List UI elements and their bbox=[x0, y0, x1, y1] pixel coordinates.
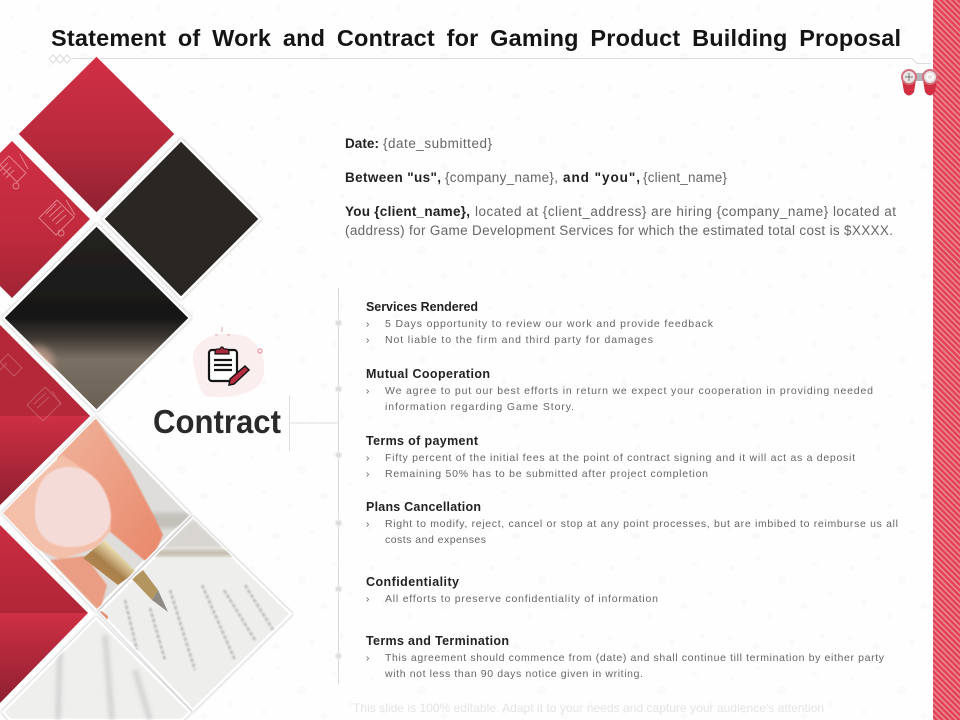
index finger bbox=[55, 418, 163, 565]
footer note: This slide is 100% editable. Adapt it to your needs and capture your audience's attention bbox=[353, 701, 824, 715]
section: services rendered bbox=[366, 300, 714, 346]
section: services rendered: › bbox=[366, 319, 369, 330]
right striped band bbox=[933, 0, 960, 720]
section: confidentiality bbox=[366, 575, 658, 605]
icon: contract clipboard bbox=[193, 327, 264, 397]
dark diamond bbox=[103, 140, 260, 298]
thumb bbox=[0, 455, 111, 560]
lower paper diamond bbox=[3, 618, 190, 720]
nail bbox=[35, 467, 111, 547]
section: mutual cooperation: information regarding Game Story. bbox=[385, 401, 574, 413]
section: mutual cooperation: We agree to put our best efforts in return we expect your cooperation in providing needed bbox=[385, 385, 873, 397]
section: confidentiality: › bbox=[366, 594, 369, 605]
section: mutual cooperation: Mutual Cooperation bbox=[366, 367, 490, 381]
red diamond left with document icons bbox=[0, 141, 90, 298]
icon: game controller bbox=[902, 70, 937, 96]
pen body bbox=[83, 540, 136, 585]
section: terms of payment: Terms of payment bbox=[366, 434, 479, 448]
intro text block bbox=[345, 136, 896, 238]
section: terms of payment bbox=[366, 434, 855, 480]
section: services rendered: Not liable to the firm and third party for damages bbox=[385, 334, 653, 346]
section: services rendered: › bbox=[366, 335, 369, 346]
section: mutual cooperation bbox=[366, 367, 873, 413]
heading: contract: Contract bbox=[153, 403, 281, 440]
section: terms of payment: Fifty percent of the initial fees at the point of contract signing and it will act as a deposit bbox=[385, 452, 855, 464]
connector lines bbox=[289, 396, 339, 451]
timeline bbox=[336, 288, 342, 684]
section: terms and termination: › bbox=[366, 653, 369, 664]
parties line bbox=[345, 170, 727, 185]
section: terms of payment: Remaining 50% has to be submitted after project completion bbox=[385, 468, 708, 480]
red diamond top bbox=[18, 56, 175, 213]
date line: Date: bbox=[345, 136, 379, 151]
parties line: Between "us", bbox=[345, 170, 441, 185]
section: terms of payment: › bbox=[366, 453, 369, 464]
section: terms and termination: with not less than 90 days notice given in writing. bbox=[384, 668, 643, 680]
hiring paragraph: You {client_name}, bbox=[345, 204, 470, 219]
section: plans cancellation: costs and expenses bbox=[385, 534, 486, 546]
section: confidentiality: Confidentiality bbox=[366, 575, 459, 589]
hiring paragraph bbox=[345, 204, 896, 238]
section: plans cancellation: Plans Cancellation bbox=[366, 500, 481, 514]
section: plans cancellation: › bbox=[366, 519, 369, 530]
hiring paragraph: (address) for Game Development Services for which the estimated total cost is $XXXX. bbox=[345, 223, 893, 238]
section: services rendered: 5 Days opportunity to review our work and provide feedback bbox=[385, 318, 714, 330]
title rule bbox=[49, 55, 931, 64]
section: terms and termination bbox=[366, 634, 885, 680]
section: terms of payment: › bbox=[366, 469, 369, 480]
pen photo diamond bbox=[0, 418, 195, 612]
parties line: {client_name} bbox=[643, 170, 727, 185]
red area middle left with document icons bbox=[0, 325, 90, 505]
red area lower left bbox=[0, 525, 88, 703]
section: services rendered: Services Rendered bbox=[366, 300, 478, 314]
parties line: and "you", bbox=[563, 170, 640, 185]
section: terms and termination: This agreement should commence from (date) and shall continue till termination by either party bbox=[385, 652, 885, 664]
hiring paragraph: located at {client_address} are hiring {company_name} located at bbox=[475, 204, 896, 219]
lower finger bbox=[50, 556, 107, 612]
paper photo diamond bbox=[88, 518, 291, 710]
section: plans cancellation bbox=[366, 500, 898, 546]
section: mutual cooperation: › bbox=[366, 386, 369, 397]
section: plans cancellation: Right to modify, reject, cancel or stop at any point processes, but are imbibed to reimburse us all bbox=[385, 518, 898, 530]
date line: {date_submitted} bbox=[383, 136, 492, 151]
section: terms and termination: Terms and Termination bbox=[366, 634, 509, 648]
pen tip bbox=[132, 570, 158, 600]
section: confidentiality: All efforts to preserve confidentiality of information bbox=[385, 593, 658, 605]
title: Statement of Work and Contract for Gaming Product Building Proposal bbox=[51, 25, 901, 51]
black blurred diamond bbox=[3, 225, 190, 411]
photo collage bbox=[0, 56, 291, 720]
parties line: {company_name}, bbox=[445, 170, 558, 185]
